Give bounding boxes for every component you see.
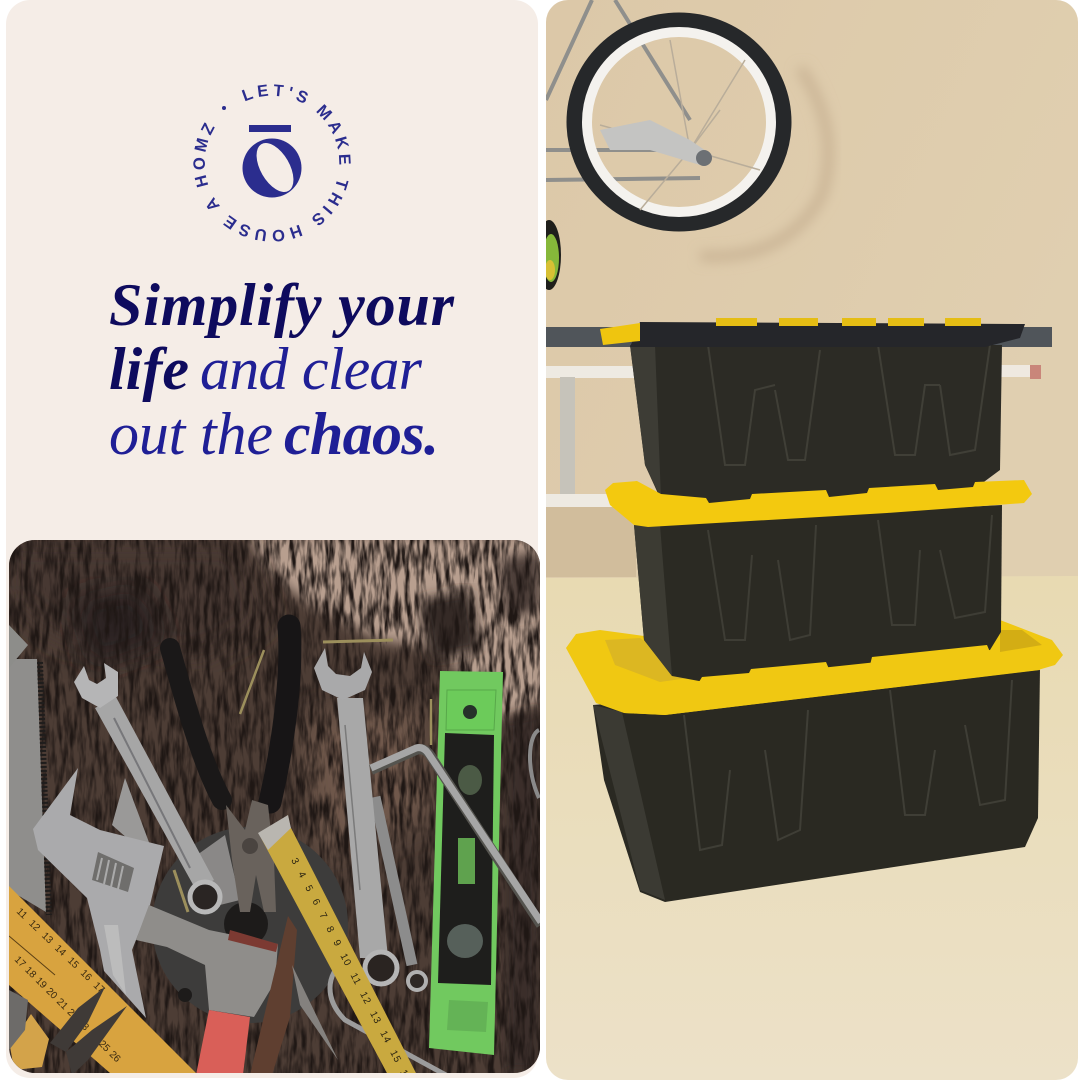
photo: stacked storage bins in garage (537, 0, 1078, 1080)
garage floor (546, 576, 1078, 1080)
logo macron bar (249, 125, 291, 132)
storage rack (546, 327, 1052, 507)
logo letter o (242, 137, 302, 198)
long wrench centre (314, 648, 397, 984)
heading (109, 272, 455, 467)
logo dot (222, 106, 226, 110)
level vial centre (458, 838, 475, 884)
bottom lid front lip with notches (624, 645, 1040, 715)
photo: tools on wood (9, 540, 540, 1073)
bin: middle (634, 505, 1002, 681)
heading line 3 regular: out the (109, 401, 273, 467)
tape measure (258, 815, 416, 1073)
heading line 2 regular: and clear (200, 336, 423, 402)
bin body middle (634, 505, 1002, 681)
small wrench left (74, 663, 220, 912)
heading line 2 bold: life (109, 336, 189, 402)
bin: top body (630, 345, 1002, 510)
scrap metal (9, 990, 28, 1050)
screws (174, 640, 431, 912)
folding ruler (9, 886, 196, 1073)
logo ring text: LET'S MAKE THIS HOUSE A HOMZ (193, 84, 351, 242)
edge clip at right (530, 730, 539, 798)
wall shadow band (546, 507, 636, 577)
spirit level (429, 671, 503, 1055)
circular saw blade (152, 827, 348, 1023)
metal loop tool (328, 970, 448, 1073)
garage wall (546, 0, 1078, 578)
side cutters (50, 987, 127, 1075)
level vial bottom (447, 924, 483, 958)
bin lid bottom (566, 620, 1063, 715)
tape numbers: 3 4 5 6 7 8 9 10 11 12 13 14 15 16 (292, 858, 408, 1073)
wood background (9, 535, 545, 1073)
logo: circular badge (193, 84, 351, 242)
ruler numbers lower: 17 18 19 20 21 22 23 24 25 26 (14, 956, 120, 1062)
yellow block (10, 1014, 49, 1070)
bicycle wheel (546, 0, 828, 256)
hammer handle (196, 1010, 250, 1075)
level vial top (458, 765, 482, 795)
bin: bottom (566, 620, 1063, 902)
bin lid middle (605, 480, 1032, 527)
bin body bottom (593, 668, 1040, 902)
heading line 1: Simplify your (109, 272, 455, 338)
bin lid top (600, 318, 1025, 347)
ball on wall (546, 220, 561, 290)
hand saw (9, 625, 49, 915)
adjustable wrench (33, 768, 164, 1018)
second small wrench behind (375, 797, 426, 990)
heading line 3 bold: chaos. (284, 401, 439, 467)
panel: cream text panel (6, 0, 538, 1078)
pliers (170, 626, 290, 912)
allen key (371, 748, 541, 925)
hammer head (136, 905, 278, 1017)
pruning saw (250, 916, 338, 1075)
ruler numbers: 11 12 13 14 15 16 17 (16, 908, 106, 992)
hammer (136, 905, 278, 1075)
